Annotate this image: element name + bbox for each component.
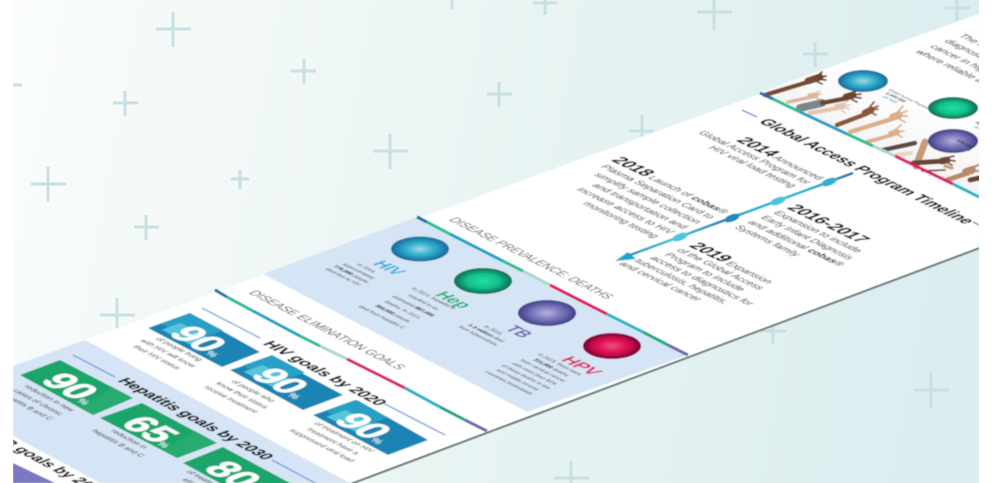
timeline 2014: 2014 Announced	[732, 135, 834, 182]
timeline 2016-2017: Early Infant Diagnosis	[757, 215, 856, 261]
text: Hep deaths: estimated 887,000	[390, 295, 435, 317]
text: Hep deaths: died from hepatitis C.	[356, 305, 408, 330]
text: TB deaths: 1.3 million died	[465, 324, 506, 343]
caption: Hep 65: reduction in	[108, 429, 150, 450]
timeline 2018: increase access to HIV	[573, 187, 677, 235]
timeline line	[615, 173, 853, 261]
strip: prevalence divider	[417, 217, 688, 355]
box: Hep 90 percent: 90%	[30, 369, 117, 409]
box: Hep 80 percent	[183, 447, 303, 483]
timeline 2016-2017: and additional cobas®	[744, 220, 847, 268]
timeline 2018: monitoring testing	[579, 201, 662, 239]
sphere captions: Global Access Program	[887, 89, 932, 110]
box: HIV 90 percent treatment: 90%	[240, 364, 328, 403]
timeline 2016-2017	[735, 204, 872, 266]
timeline 2014: Global Access Program for	[695, 130, 814, 186]
sphere captions: on test	[880, 95, 900, 104]
text: HPV deaths: from cervical cancer	[518, 359, 567, 383]
text: Hep deaths: deaths. In 2015,	[382, 300, 423, 320]
text: HIV deaths	[325, 263, 376, 286]
caption: HIV first 90	[126, 334, 210, 373]
caption: Hep 90	[0, 383, 79, 421]
box: Hep 65 percent: 65%	[110, 412, 197, 452]
heading: disease prevalence: DISEASE PREVALENCE: DEATHS	[445, 216, 617, 300]
box: HIV 90 percent know status: 90%	[158, 322, 246, 361]
text: HPV deaths	[484, 353, 582, 396]
text: HIV deaths: approximately	[340, 263, 376, 280]
sphere captions: 1,000,000	[883, 92, 908, 103]
text: HPV deaths: 311,000 deaths	[531, 358, 570, 377]
box: TB	[13, 463, 55, 483]
icon: Hep sphere	[454, 268, 512, 294]
timeline nodes	[671, 176, 838, 243]
caption: HIV second 90	[201, 377, 284, 414]
icon: HIV sphere	[391, 236, 449, 262]
caption: HIV second 90: receive treatment	[201, 385, 261, 414]
timeline 2018: 2018 Launch of cobas®	[607, 155, 739, 216]
strip: elimination divider	[215, 290, 487, 431]
heading: HIV goals: HIV goals by 2020	[258, 339, 391, 408]
text: Hep deaths: In 2015, hepatitis B	[409, 287, 457, 310]
sheet background	[13, 93, 979, 483]
caption: HIV second 90: know their status	[213, 381, 271, 410]
caption: HIV third 90: of treatment on HIV	[312, 421, 377, 453]
caption: HIV first 90: with HIV will know	[137, 338, 199, 369]
icon: TB sphere	[518, 300, 576, 326]
panel: hands background	[760, 31, 979, 195]
text: Hep deaths: 399,000 people	[372, 304, 412, 323]
text: HPV deaths: In 2018, there were	[535, 353, 583, 376]
label: TB: TB	[500, 323, 538, 340]
box: HIV 90 percent suppressed: 90%	[323, 409, 411, 448]
icon: blue sphere	[838, 70, 888, 92]
label: Hep: Hep	[430, 289, 477, 310]
sphere captions: on test	[952, 143, 972, 152]
timeline 2019: of the Global Access	[673, 248, 767, 291]
timeline 2016-2017: Systems family	[731, 224, 804, 258]
icon: green sphere	[928, 97, 978, 119]
timeline 2018: simplify sample collection	[590, 172, 704, 225]
timeline 2018: Plasma Separation Card to	[597, 164, 717, 220]
timeline 2018	[576, 156, 728, 239]
heading: hepatitis goals: Hepatitis goals by 2030	[113, 376, 277, 462]
box: HIV 90 percent suppressed	[313, 400, 428, 455]
panel: disease prevalence	[263, 217, 688, 412]
caption: HIV second 90: of people who	[229, 379, 278, 403]
timeline 2016-2017: 2016-2017	[782, 202, 875, 245]
report sheet shadow	[350, 248, 979, 483]
text: HPV deaths: countries (estimated).	[482, 371, 535, 396]
intro text	[916, 33, 979, 83]
label: HPV: HPV	[556, 354, 608, 378]
heading: HIV goals	[202, 308, 445, 435]
timeline 2019: Program to include	[661, 252, 748, 293]
caption: HIV third 90: suppressed viral load	[287, 428, 357, 463]
text: HPV deaths: and middle income	[494, 369, 540, 391]
heading: hepatitis goals	[73, 355, 315, 483]
box: Hep 90 percent	[20, 360, 133, 415]
text: HIV deaths: died due to HIV.	[323, 268, 363, 287]
box: HIV 90 percent treatment	[230, 355, 343, 410]
panel: hepatitis goals	[13, 340, 350, 483]
timeline 2018: and transportation and	[589, 183, 690, 230]
sphere captions: on test	[971, 125, 991, 134]
label: HIV: HIV	[368, 258, 411, 277]
box: Hep 65 percent	[100, 403, 217, 458]
timeline 2019	[618, 242, 772, 306]
text: HIV deaths: 770,000 people	[331, 265, 370, 284]
text: HPV deaths: of these deaths in low	[499, 364, 553, 390]
text: TB deaths: from tuberculosis.	[456, 325, 501, 347]
caption: Hep 90: reduction in new	[22, 384, 78, 413]
text: HPV deaths: with more than 85%	[509, 362, 558, 386]
box: HIV 90 percent know status	[148, 313, 260, 367]
caption: HIV third 90	[287, 420, 380, 463]
heading: disease elimination: DISEASE ELIMINATION GOALS	[245, 289, 409, 371]
timeline 2019: access to diagnostics for	[646, 255, 757, 307]
icon: purple sphere	[928, 129, 978, 153]
text: Hep deaths: resulted in an	[405, 294, 440, 311]
timeline 2016-2017: Expansion to include	[770, 210, 865, 254]
sphere captions: 500,000	[954, 139, 975, 149]
timeline 2014: HIV viral load testing	[705, 145, 799, 189]
caption: Hep 65: hepatitis B and C	[89, 428, 148, 458]
sphere captions	[882, 88, 979, 152]
strip: hands divider	[760, 93, 979, 197]
timeline 2019: 2019 Expansion	[684, 240, 783, 285]
caption: HIV third 90: treatment have a	[304, 427, 363, 456]
text: Hep deaths	[356, 286, 459, 330]
text: HIV deaths: In 2016,	[354, 263, 378, 274]
timeline 2019: tuberculosis, hepatitis,	[631, 258, 731, 305]
caption: HIV first 90: of people living	[153, 336, 206, 362]
hands illustration	[765, 72, 979, 180]
text: TB deaths: In 2016,	[481, 325, 505, 336]
caption: Hep 90: cases of chronic	[11, 388, 66, 416]
arrow head	[615, 252, 636, 261]
caption: HIV first 90: their HIV status	[130, 344, 184, 371]
icon: HPV sphere	[583, 333, 641, 359]
timeline 2019: and cervical cancer	[615, 261, 705, 303]
